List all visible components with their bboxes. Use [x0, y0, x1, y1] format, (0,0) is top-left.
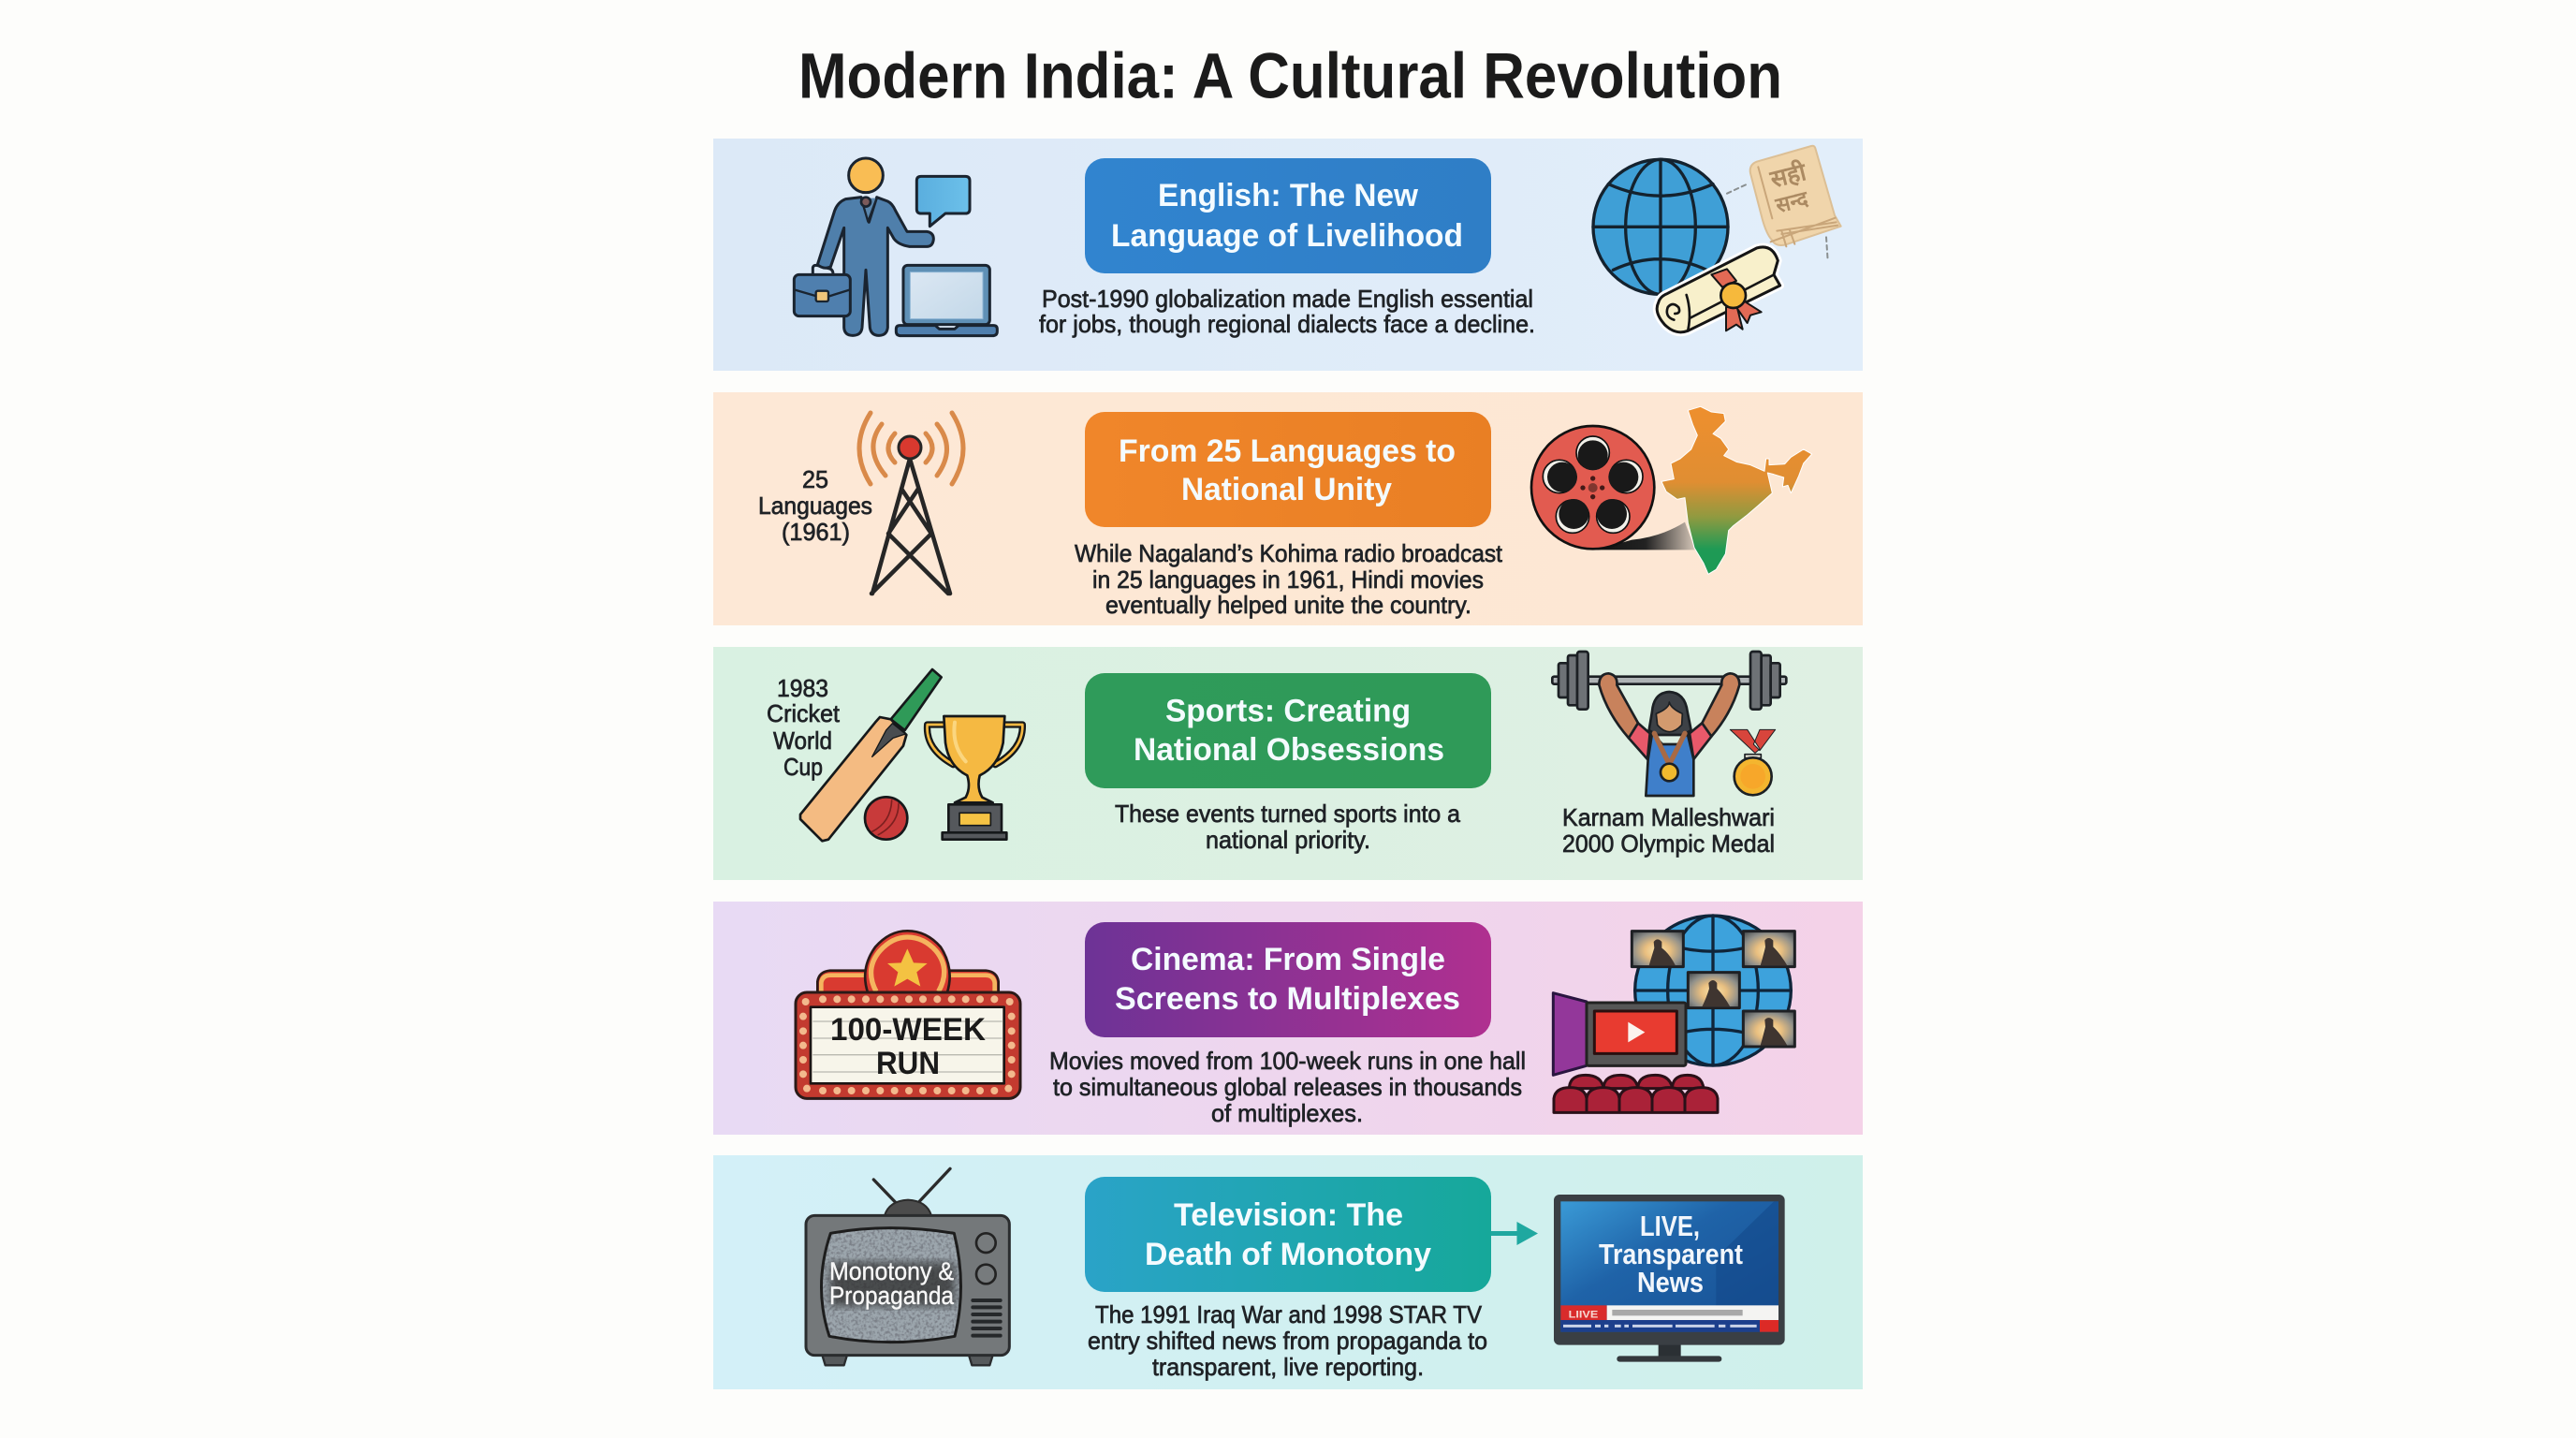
- label: Karnam Malleshwari: Karnam Malleshwari: [1562, 803, 1775, 831]
- label: Monotony & Propaganda: Propaganda: [829, 1282, 955, 1310]
- label: 25 Languages (1961): 25: [802, 465, 828, 493]
- panel background: Sports: [713, 647, 1863, 880]
- pill heading: Languages: From 25 Languages to: [1119, 433, 1456, 469]
- pill heading: Television: [1085, 1177, 1491, 1292]
- description: Television: entry shifted news from propaganda to: [1088, 1327, 1487, 1355]
- label: Monotony & Propaganda: Monotony &: [829, 1257, 954, 1285]
- label: 25 Languages (1961): [758, 465, 872, 546]
- icon: cricket bat, ball and trophy: [800, 669, 1022, 841]
- description: Cinema: [1049, 1047, 1526, 1127]
- pill heading: English: English: The New: [1158, 178, 1419, 213]
- description: Television: The 1991 Iraq War and 1998 STAR TV: [1095, 1300, 1483, 1328]
- icon: globe, Sanskrit book and diploma scroll: सन्द: [1772, 185, 1811, 217]
- description: English: for jobs, though regional dialects face a decline.: [1039, 310, 1535, 338]
- arrow: to live news: [1491, 1222, 1538, 1245]
- description: Sports: These events turned sports into a: [1115, 800, 1461, 828]
- label: 1983 Cricket World Cup: Cricket: [767, 699, 841, 727]
- icon: weightlifter and medal: [1552, 652, 1786, 796]
- description: Cinema: Movies moved from 100-week runs in one hall: [1049, 1047, 1526, 1075]
- label: LIVE, Transparent News: News: [1637, 1266, 1704, 1299]
- icon: theatre marquee: [796, 931, 1020, 1098]
- description: Sports: national priority.: [1206, 826, 1370, 854]
- description: Sports: [1115, 800, 1461, 854]
- label: 1983 Cricket World Cup: 1983: [777, 674, 828, 702]
- icon: old television with static: [806, 1168, 1009, 1365]
- icon: globe, Sanskrit book and diploma scroll: सही: [1766, 157, 1810, 194]
- pill heading: Television: Death of Monotony: [1145, 1237, 1431, 1272]
- label: 25 Languages (1961): (1961): [782, 518, 850, 546]
- pill heading: Cinema: Screens to Multiplexes: [1115, 981, 1460, 1017]
- pill heading: Sports: Sports: Creating: [1165, 693, 1411, 728]
- description: English: [1039, 285, 1535, 338]
- description: Television: [1088, 1300, 1487, 1381]
- pill heading: Cinema: Cinema: From Single: [1131, 942, 1445, 977]
- marquee text: 100-WEEK: [830, 1012, 986, 1048]
- description: Cinema: of multiplexes.: [1211, 1099, 1363, 1127]
- panel background: Cinema: [713, 902, 1863, 1135]
- description: Languages: eventually helped unite the country.: [1105, 591, 1471, 619]
- description: Languages: While Nagaland’s Kohima radio broadcast: [1075, 539, 1503, 567]
- label: Karnam Malleshwari: 2000 Olympic Medal: [1562, 829, 1775, 858]
- label: LIVE, Transparent News: LIVE,: [1640, 1210, 1700, 1242]
- icon: globe, Sanskrit book and diploma scroll: [1593, 146, 1841, 332]
- pill heading: Sports: National Obsessions: [1134, 732, 1444, 768]
- panel: Cinema: [713, 902, 1863, 1135]
- label: Karnam Malleshwari: [1562, 803, 1775, 858]
- description: Television: transparent, live reporting.: [1152, 1353, 1424, 1381]
- label: 1983 Cricket World Cup: World: [773, 726, 832, 755]
- label: Monotony & Propaganda: [829, 1257, 955, 1310]
- pill heading: Television: Television: The: [1174, 1197, 1403, 1233]
- label: 1983 Cricket World Cup: Cup: [783, 753, 823, 781]
- icon: film reel and India map: [1531, 406, 1812, 574]
- label: LIVE, Transparent News: [1599, 1210, 1743, 1299]
- pill heading: Languages: [1085, 412, 1491, 527]
- panel: Languages: [713, 392, 1863, 625]
- icon: modern TV with live news: [1554, 1195, 1785, 1362]
- marquee text: [830, 1012, 986, 1081]
- panel background: Television: [713, 1155, 1863, 1389]
- icon: radio tower with waves: [859, 413, 963, 594]
- description: English: Post-1990 globalization made English essential: [1042, 285, 1533, 313]
- icon: projector, globe with screens and theatre seats: [1553, 916, 1794, 1112]
- description: Languages: in 25 languages in 1961, Hindi movies: [1092, 565, 1484, 594]
- title: Modern India: A Cultural Revolution: [798, 39, 1782, 112]
- label: LIVE, Transparent News: Transparent: [1599, 1238, 1743, 1270]
- description: Cinema: to simultaneous global releases in thousands: [1053, 1073, 1522, 1101]
- marquee text: RUN: [876, 1046, 940, 1081]
- description: Languages: [1075, 539, 1503, 619]
- panel: Television: [713, 1155, 1863, 1389]
- pill heading: English: [1085, 158, 1491, 273]
- label: 1983 Cricket World Cup: [767, 674, 841, 781]
- label: 25 Languages (1961): Languages: [758, 492, 872, 520]
- icon: modern TV with live news: LIIVE: [1569, 1309, 1599, 1320]
- panel background: Languages: [713, 392, 1863, 625]
- pill heading: Sports: [1085, 673, 1491, 788]
- icon: businessman with briefcase, speech bubble and laptop: [794, 158, 997, 336]
- panel: Sports: [713, 647, 1863, 880]
- panel: English: [713, 139, 1863, 371]
- pill heading: Cinema: [1085, 922, 1491, 1037]
- pill heading: Languages: National Unity: [1181, 472, 1392, 507]
- pill heading: English: Language of Livelihood: [1111, 218, 1463, 254]
- panel background: English: [713, 139, 1863, 371]
